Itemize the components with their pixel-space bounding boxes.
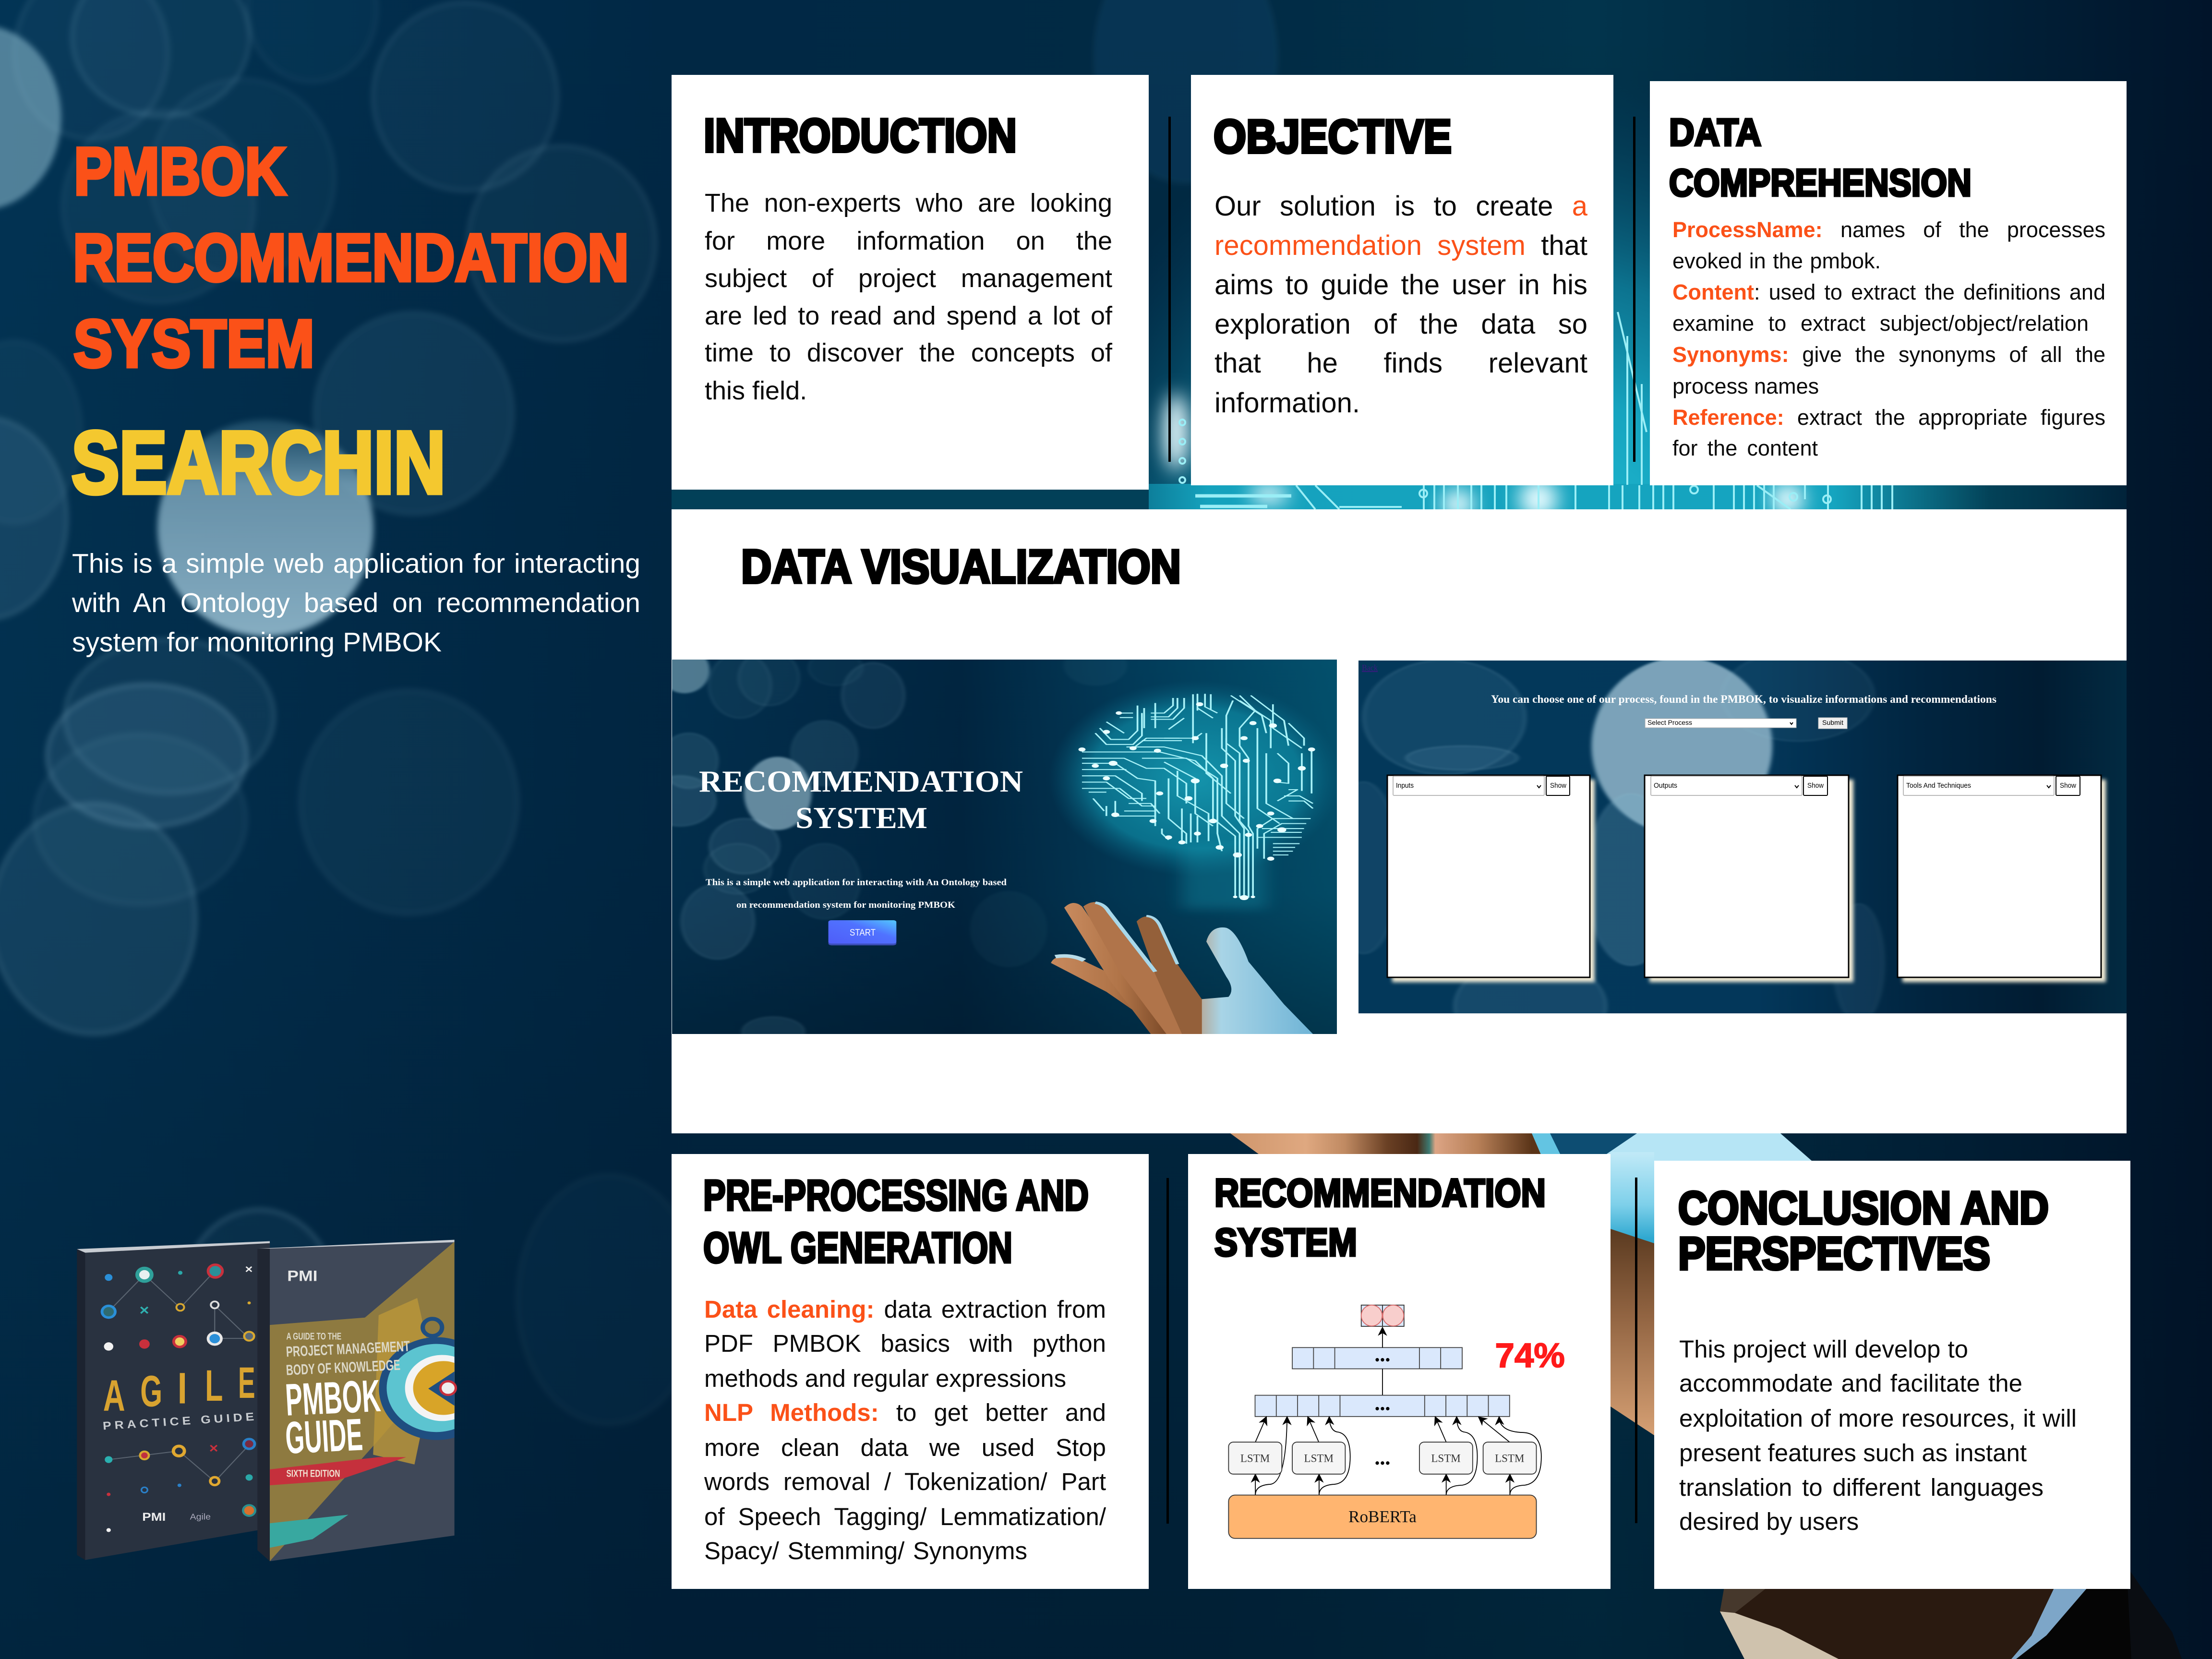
diagram: LSTM boxes: LSTM <box>1304 1452 1334 1464</box>
tagline text: with An Ontology based on recommendation <box>72 588 640 618</box>
screenshot text: start page: on recommendation system for monitoring PMBOK <box>736 900 955 910</box>
heading: introduction: INTRODUCTION <box>704 109 1017 162</box>
text: data comprehension body: examine to extract subject/object/relation <box>1672 311 2089 336</box>
text: conclusion body: exploitation of more resources, it will <box>1679 1405 2077 1432</box>
book: PMBOK guide: A GUIDE TO THE <box>287 1331 341 1342</box>
heading: conclusion and perspectives: PERSPECTIVES <box>1678 1228 1990 1279</box>
accuracy value: 74% <box>1495 1336 1565 1375</box>
book: agile: × <box>245 1262 252 1276</box>
books image: agile practice guide and PMBOK guide <box>77 1239 457 1561</box>
select: process <box>1645 719 1796 728</box>
tagline text: This is a simple web application for interacting <box>72 548 640 579</box>
diagram: layers <box>1255 1347 1510 1417</box>
main title <box>73 133 629 381</box>
screenshot text: start page: This is a simple web application for interacting with An Ontology based <box>706 878 1007 888</box>
book: PMBOK guide: PMI <box>287 1268 317 1285</box>
text: conclusion body: present features such as instant <box>1679 1439 2027 1467</box>
text: pre-processing body: PDF PMBOK basics with python <box>704 1330 1106 1357</box>
diagram: arrows <box>1255 1328 1541 1495</box>
text: pre-processing body: Data cleaning: data extraction from <box>704 1296 1106 1323</box>
button: submit: Submit <box>1822 719 1843 726</box>
text: objective body: aims to guide the user in his <box>1214 269 1587 301</box>
panel: pre-processing and owl generation <box>672 1154 1149 1589</box>
divider line: introduction and objective <box>1168 117 1171 462</box>
book: agile: × <box>140 1302 149 1318</box>
text: introduction body: for more information on the <box>705 227 1112 255</box>
text: data comprehension body: for the content <box>1672 436 1818 460</box>
divider line: recommendation and conclusion <box>1635 1178 1637 1523</box>
screenshot text: start page: SYSTEM <box>795 801 927 835</box>
text: objective body: recommendation system that <box>1214 230 1587 261</box>
card: outputs: Outputs <box>1654 781 1677 790</box>
screenshot: process selection page <box>1358 661 2127 1013</box>
diagram: output nodes <box>1361 1305 1404 1326</box>
book: agile: I <box>178 1364 187 1413</box>
diagram: RoBERTa block <box>1228 1495 1537 1539</box>
screenshot text: start page: START <box>850 928 876 938</box>
text: data comprehension body: process names <box>1672 374 1819 398</box>
screenshot text: start page: RECOMMENDATION <box>699 764 1023 798</box>
text: conclusion body <box>1679 1334 2078 1540</box>
text: introduction body: are led to read and spend a lot of <box>705 301 1112 330</box>
panel: conclusion and perspectives <box>1654 1161 2130 1589</box>
divider line: pre-processing and recommendation <box>1166 1178 1169 1524</box>
select: process: Select Process <box>1647 719 1692 726</box>
text: data comprehension body: Synonyms: give the synonyms of all the <box>1672 342 2105 367</box>
book: agile: PMI <box>142 1510 166 1524</box>
screenshot text: start page <box>672 660 1337 1034</box>
diagram: LSTM boxes: LSTM <box>1495 1452 1524 1464</box>
icon: glowing circuit brain <box>1049 680 1342 909</box>
book: PMBOK guide: SIXTH EDITION <box>287 1467 340 1479</box>
text: conclusion body: translation to different languages <box>1679 1474 2044 1501</box>
text: objective body: that he finds relevant <box>1214 348 1587 379</box>
text: objective body: Our solution is to create a <box>1214 191 1587 222</box>
screenshot heading: choose process: You can choose one of our process, found in the PMBOK, to visualize informations and recommendations <box>1491 693 1996 705</box>
card: tools and techniques: Tools And Techniques <box>1906 781 1971 790</box>
book: agile: L <box>205 1361 223 1410</box>
text: introduction body <box>705 189 1113 405</box>
book: agile: A <box>103 1371 125 1420</box>
text: pre-processing body: Spacy/ Stemming/ Synonyms <box>704 1537 1027 1564</box>
panel: data comprehension <box>1650 81 2127 485</box>
panel: objective <box>1191 75 1613 485</box>
text: pre-processing body: NLP Methods: to get better and <box>704 1399 1106 1426</box>
button: submit <box>1818 718 1847 729</box>
text: conclusion body: desired by users <box>1679 1508 1859 1535</box>
book: agile: G <box>140 1367 162 1416</box>
book: agile: Agile <box>190 1512 211 1521</box>
book: PMBOK guide <box>257 1240 456 1561</box>
heading: data visualization: DATA VISUALIZATION <box>741 540 1181 593</box>
tagline text <box>72 548 640 658</box>
text: objective body <box>1214 190 1587 421</box>
diagram: RoBERTa block: RoBERTa <box>1348 1507 1417 1526</box>
heading and diagram: recommendation system: SYSTEM <box>1214 1221 1357 1264</box>
text: introduction body: this field. <box>705 376 807 405</box>
diagram: LSTM boxes <box>1228 1442 1537 1474</box>
card: inputs: Show <box>1550 781 1566 790</box>
heading: data comprehension: COMPREHENSION <box>1669 161 1972 204</box>
heading: data comprehension: DATA <box>1669 111 1761 154</box>
heading: conclusion and perspectives <box>1654 1161 2130 1589</box>
panel: introduction <box>672 75 1149 490</box>
divider line: objective and data comprehension <box>1633 117 1635 462</box>
text: introduction body: The non-experts who are looking <box>705 189 1112 217</box>
text: data comprehension body: evoked in the pmbok. <box>1672 249 1881 273</box>
text: conclusion body: This project will develop to <box>1679 1335 1968 1363</box>
card shadows <box>1392 780 2106 982</box>
subtitle: searchin: SEARCHIN <box>72 413 445 512</box>
diagram: LSTM boxes: LSTM <box>1431 1452 1461 1464</box>
heading and diagram: recommendation system: RECOMMENDATION <box>1214 1171 1546 1215</box>
heading: pre-processing: OWL GENERATION <box>703 1224 1012 1272</box>
heading: objective: OBJECTIVE <box>1214 110 1452 163</box>
button: start <box>829 920 896 945</box>
text: pre-processing body: more clean data we used Stop <box>704 1434 1106 1461</box>
main title: PMBOK <box>74 133 286 209</box>
text: data comprehension body <box>1672 216 2105 456</box>
heading: pre-processing <box>672 1154 1149 1589</box>
text: objective body: information. <box>1214 387 1360 419</box>
text: objective body: exploration of the data so <box>1214 309 1587 340</box>
card: tools and techniques <box>1898 775 2101 977</box>
text: introduction body: subject of project management <box>705 264 1112 293</box>
heading: conclusion and perspectives: CONCLUSION AND <box>1678 1182 2049 1234</box>
icon: hand <box>1051 902 1313 1034</box>
text: pre-processing body: methods and regular expressions <box>704 1365 1066 1392</box>
text: data comprehension body: Reference: extract the appropriate figures <box>1672 405 2105 430</box>
heading: data comprehension <box>1650 81 2127 485</box>
panel: recommendation system <box>1188 1154 1611 1589</box>
tagline text: system for monitoring PMBOK <box>72 627 442 658</box>
diagram: LSTM boxes: LSTM <box>1240 1452 1270 1464</box>
book: agile: E <box>238 1358 255 1407</box>
book: PMBOK guide: GUIDE <box>284 1409 364 1463</box>
book: agile <box>77 1241 270 1560</box>
card: inputs: Inputs <box>1396 781 1414 790</box>
text: introduction body: time to discover the concepts of <box>705 338 1112 367</box>
text: pre-processing body: words removal / Tokenization/ Part <box>704 1468 1106 1495</box>
screenshot: recommendation system start page <box>672 660 1337 1034</box>
heading and diagram: recommendation system <box>1188 1154 1611 1589</box>
text: pre-processing body <box>704 1293 1106 1567</box>
card: outputs: Show <box>1807 781 1824 790</box>
text: conclusion body: accommodate and facilitate the <box>1679 1370 2022 1397</box>
book: agile: × <box>209 1441 218 1456</box>
book: agile: PRACTICE GUIDE <box>102 1410 254 1432</box>
link: back: Back <box>1362 663 1378 673</box>
main title: SYSTEM <box>73 306 314 381</box>
book: PMBOK guide: PROJECT MANAGEMENT <box>286 1338 410 1360</box>
book: PMBOK guide: BODY OF KNOWLEDGE <box>286 1357 401 1378</box>
text: pre-processing body: of Speech Tagging/ Lemmatization/ <box>704 1503 1106 1530</box>
text: data comprehension body: ProcessName: names of the processes <box>1672 217 2105 242</box>
book: PMBOK guide: PMBOK <box>284 1370 382 1425</box>
card: tools and techniques: Show <box>2060 781 2076 790</box>
card: outputs <box>1645 775 1849 977</box>
text: data comprehension body: Content: used to extract the definitions and <box>1672 280 2105 304</box>
panel: data visualization <box>672 509 2127 1133</box>
card: inputs <box>1387 775 1590 977</box>
